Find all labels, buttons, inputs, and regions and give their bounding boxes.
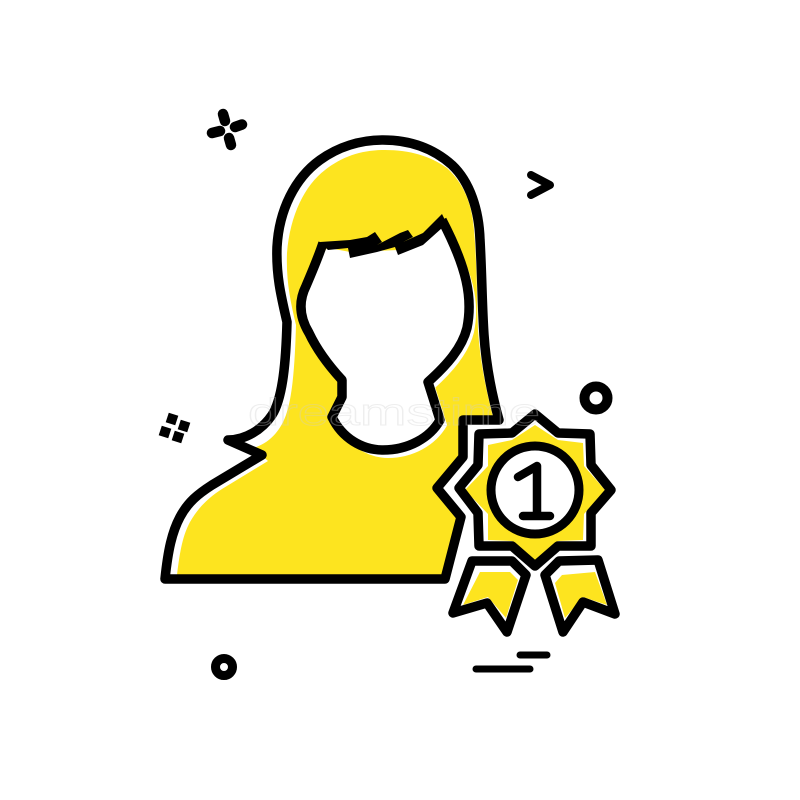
fringe [320,214,447,258]
speed lines [476,655,547,669]
hair and shoulders yellow fill [177,150,493,575]
medal inner circle [491,446,579,534]
left ribbon outline [453,561,526,632]
medal star yellow fill [465,425,605,561]
right ribbon outline [545,560,615,632]
person outline [165,140,499,579]
icon: checker diamonds [159,413,190,443]
icon: sparkle [212,114,242,145]
icon: chevron [531,175,550,195]
face white gap [305,228,474,456]
icon: woman figure [165,140,499,579]
face outline [301,220,469,450]
number one [518,466,550,516]
watermark: dreamstime [248,392,540,434]
icon: first place medal [453,414,615,632]
medal star outline [459,414,611,566]
left ribbon fill [463,572,518,618]
right ribbon fill [555,572,607,618]
icon: ring bottom left [216,658,232,676]
left ribbon [453,561,526,632]
icon: ring top right [584,386,608,410]
right ribbon [545,560,615,632]
